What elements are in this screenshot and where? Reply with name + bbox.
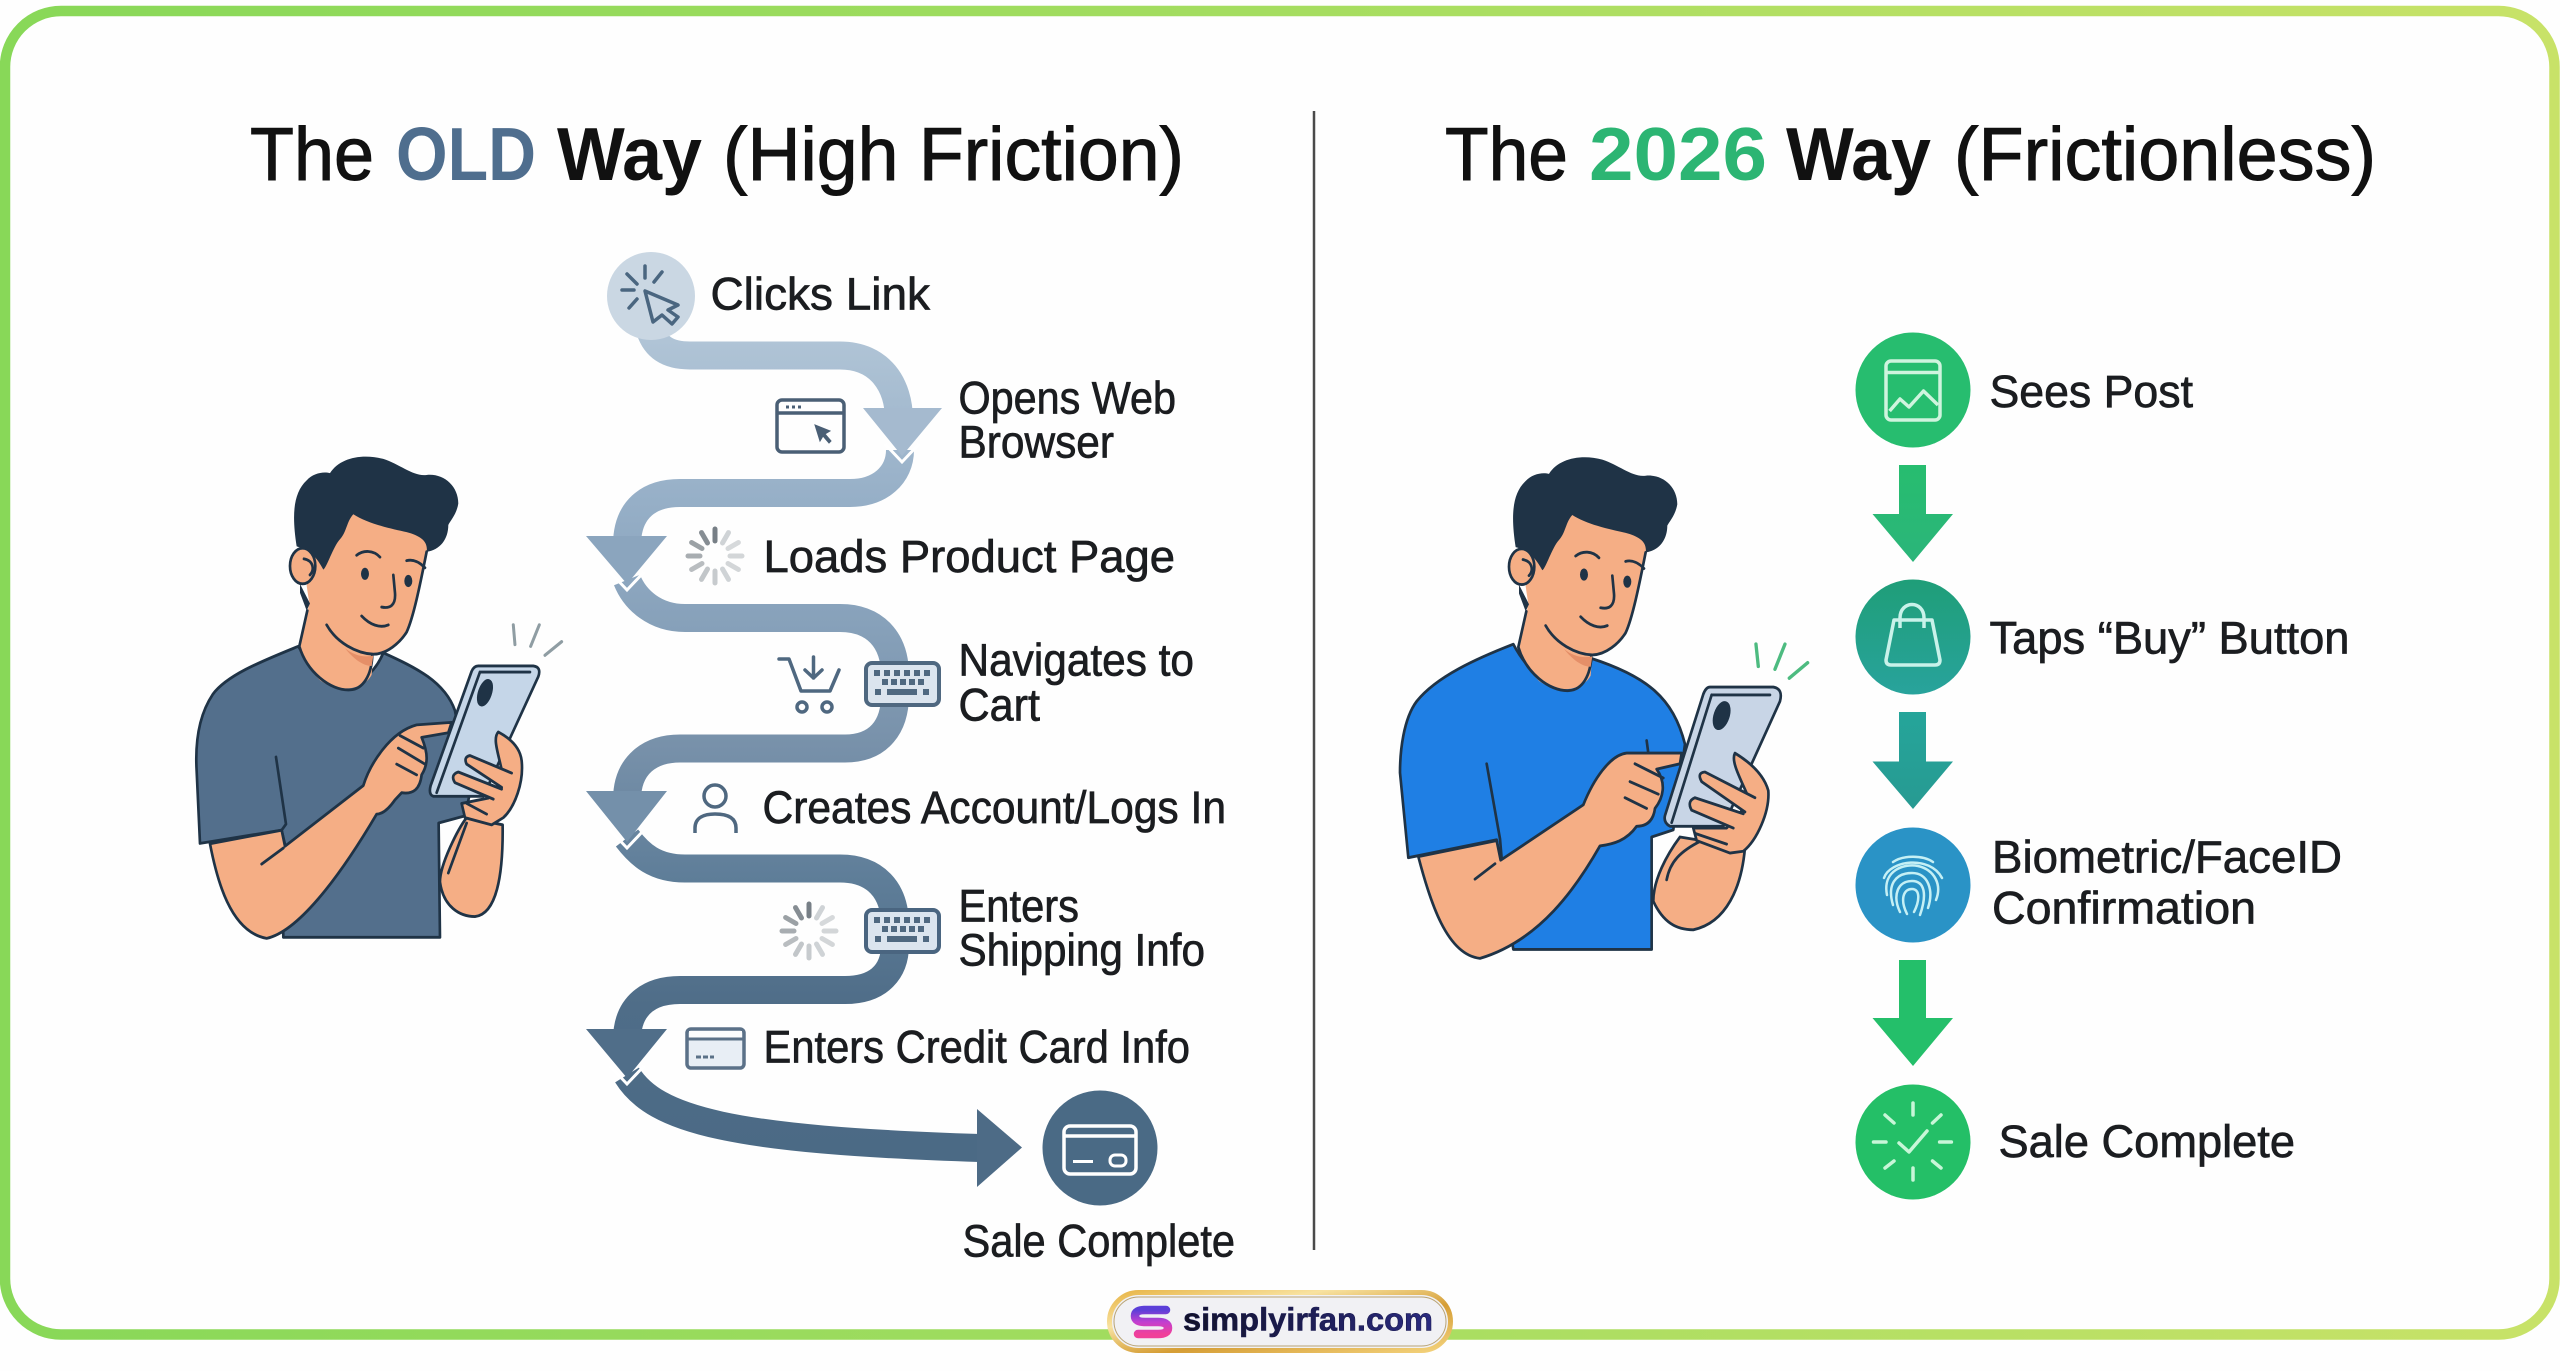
step: navigates to cart: Cart: [958, 680, 1040, 730]
icon: check clock circle: [1856, 1084, 1970, 1200]
ribbon segment: product page to cart: [627, 580, 895, 675]
title: 2026 way: (Frictionless): [1954, 112, 2376, 196]
step: clicks link: Clicks Link: [710, 268, 931, 320]
step: old way sale complete: Sale Complete: [962, 1216, 1235, 1266]
center divider: [1313, 111, 1315, 1250]
step: loads product page: Loads Product Page: [764, 531, 1175, 582]
step: old way sale complete: [962, 1090, 1235, 1266]
step: creates account: Creates Account/Logs In: [762, 782, 1226, 833]
step: enters shipping info: Shipping Info: [958, 924, 1205, 976]
step: opens web browser: Browser: [958, 416, 1114, 468]
icon: user: [695, 785, 736, 833]
step: 2026 way sale complete: Sale Complete: [1998, 1116, 2295, 1167]
white chevrons at arrow tips: [610, 444, 919, 1084]
step: sees post: [1856, 332, 2193, 448]
website text: simplyirfan.com: [1183, 1302, 1433, 1338]
title: old way: [250, 112, 1184, 196]
icon: shopping cart: [779, 657, 839, 712]
arrow: post to buy: [1872, 465, 1953, 562]
ribbon segment: account to shipping: [627, 838, 895, 925]
icon: browser window: [777, 400, 844, 452]
ribbon segment: shipping to credit card: [627, 945, 895, 1040]
icon: keyboard: [866, 663, 939, 705]
icon: S logo: [1135, 1310, 1168, 1334]
step: enters shipping info: [782, 880, 1205, 976]
step: taps buy button: Taps “Buy” Button: [1990, 612, 2350, 664]
title: 2026 way: The: [1445, 112, 1568, 196]
ribbon segment: clicks link to browser: [650, 330, 899, 420]
step: enters credit card info: Enters Credit Card Info: [764, 1022, 1190, 1072]
icon: loading spinner: [782, 904, 836, 958]
arrowheads: [586, 408, 1022, 1187]
icon: shopping bag circle: [1856, 580, 1970, 694]
icon: sale credit card circle: [1042, 1090, 1158, 1206]
friction ribbon arrow path: [610, 330, 980, 1148]
title: old way: (High Friction): [723, 112, 1184, 196]
step: clicks link: [607, 252, 931, 340]
step: 2026 way sale complete: [1856, 1084, 2295, 1200]
arrow: buy to biometric: [1872, 712, 1953, 809]
step: navigates to cart: [779, 634, 1194, 730]
ribbon segment: browser to product page: [627, 450, 900, 545]
icon: post circle: [1856, 332, 1970, 448]
icon: credit card: [687, 1029, 744, 1068]
illustration: man with grey shirt and phone: [196, 457, 562, 938]
title: old way: Way: [557, 112, 702, 196]
illustration: man with blue shirt and phone: [1400, 457, 1808, 958]
icon: keyboard: [866, 910, 939, 952]
step: biometric confirmation: Confirmation: [1992, 882, 2256, 934]
ribbon segment: credit card to sale: [627, 1075, 980, 1148]
arrow: biometric to sale: [1872, 960, 1953, 1066]
title: old way: OLD: [396, 112, 536, 196]
icon: fingerprint circle: [1856, 828, 1970, 942]
title: 2026 way: [1445, 112, 2376, 196]
step: biometric confirmation: [1856, 828, 2342, 942]
ribbon segment: cart to account: [627, 695, 895, 800]
icon: loading spinner: [688, 529, 742, 583]
step: navigates to cart: Navigates to: [958, 634, 1194, 686]
step: taps buy button: [1856, 580, 2350, 694]
step: sees post: Sees Post: [1990, 366, 2193, 417]
step: opens web browser: [777, 372, 1176, 468]
icon: cursor click: [607, 252, 695, 340]
title: 2026 way: Way: [1786, 112, 1931, 196]
step: opens web browser: Opens Web: [958, 372, 1176, 424]
title: 2026 way: 2026: [1589, 112, 1767, 196]
step: enters shipping info: Enters: [958, 880, 1079, 932]
brand badge: [1110, 1292, 1450, 1350]
title: old way: The: [250, 112, 374, 196]
step: biometric confirmation: Biometric/FaceID: [1992, 832, 2342, 882]
